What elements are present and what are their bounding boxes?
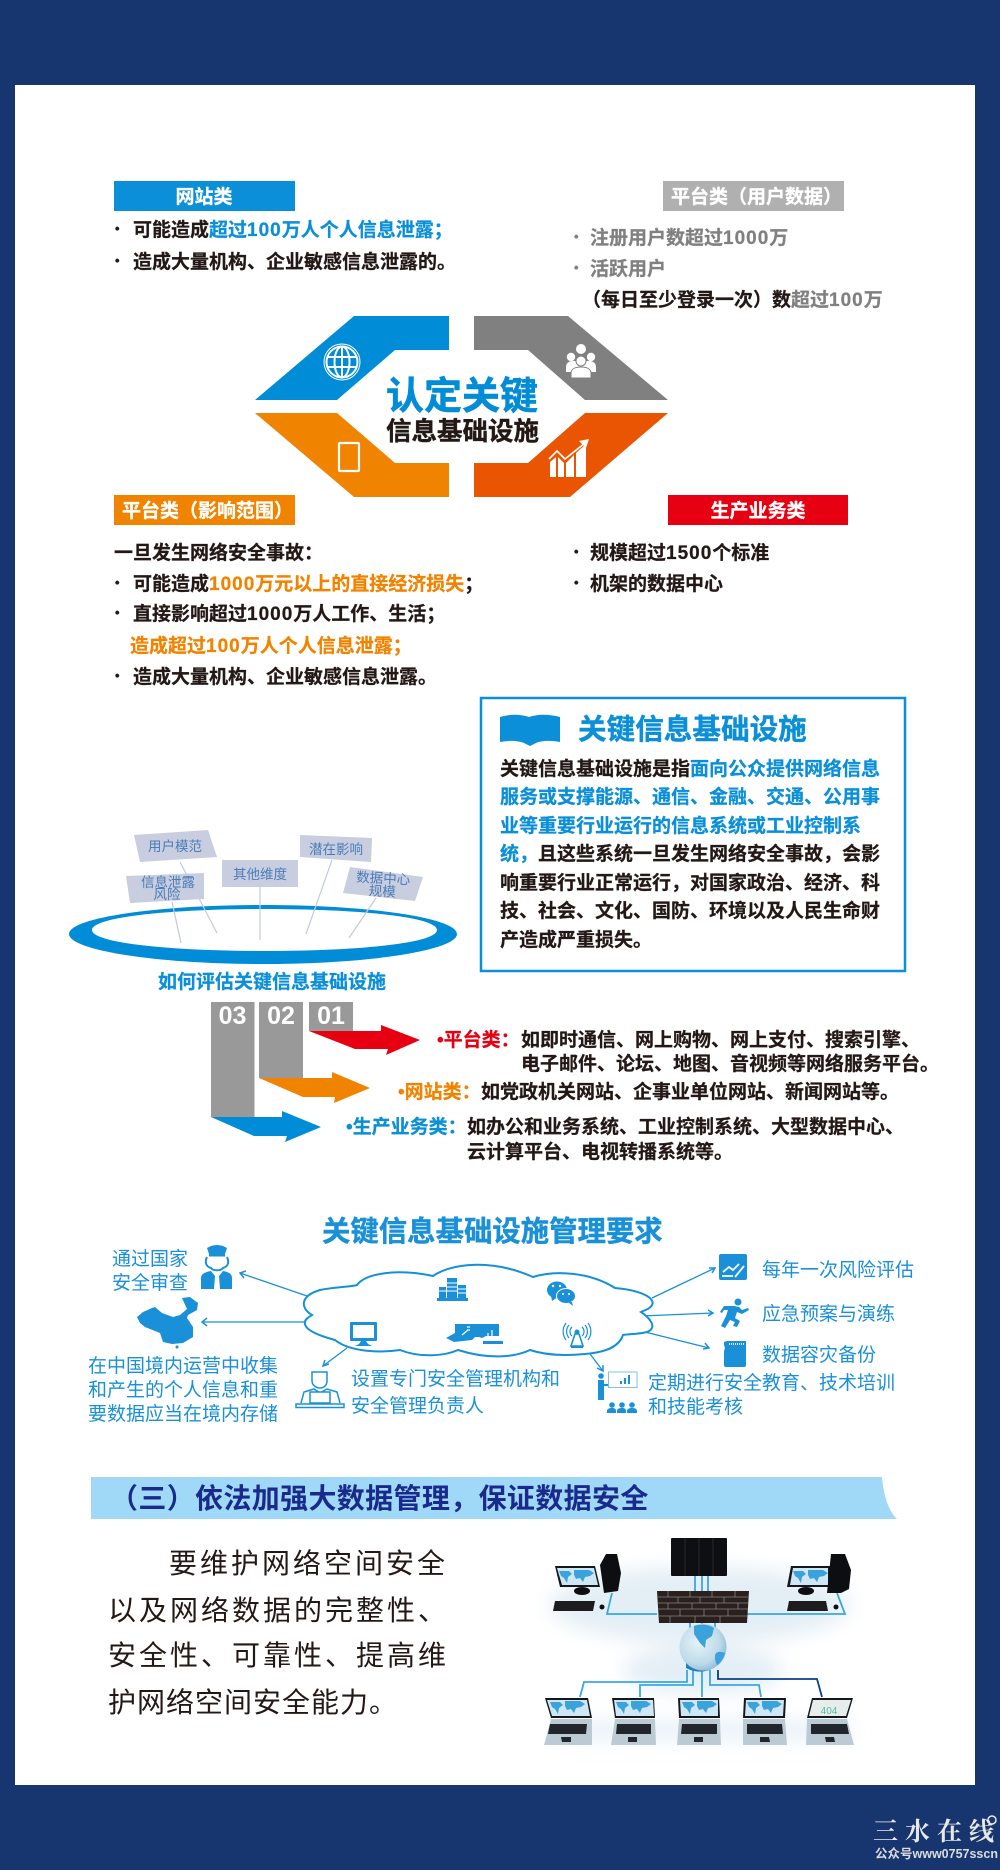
section banner: （三）依法加强大数据管理，保证数据安全 bbox=[110, 1477, 649, 1517]
definition text: 关键信息基础设施是指面向公众提供网络信息 bbox=[500, 757, 880, 780]
panel: production category bbox=[574, 495, 848, 595]
sign: 其他维度 bbox=[222, 860, 298, 887]
sign: 数据中心规模: 规模 bbox=[368, 883, 397, 900]
requirement: emergency drill bbox=[720, 1298, 895, 1328]
sign: 潜在影响 bbox=[300, 835, 372, 862]
center title bbox=[386, 376, 539, 446]
globe bbox=[680, 1624, 726, 1672]
bullet list: website: 可能造成超过100万人个人信息泄露； bbox=[133, 215, 453, 242]
requirement: risk assessment: 每年一次风险评估 bbox=[762, 1259, 914, 1281]
badge: 生产业务类 bbox=[668, 495, 848, 525]
bullet list: production: • bbox=[574, 544, 579, 559]
badge: 网站类 bbox=[114, 181, 295, 211]
icon: buildings bbox=[437, 1278, 468, 1301]
chart caption: 如何评估关键信息基础设施 bbox=[158, 970, 386, 993]
bullet list: platform user data: • bbox=[574, 260, 579, 275]
section body text: 护网络空间安全能力。 bbox=[108, 1687, 398, 1718]
segment: orange with phone icon bbox=[255, 413, 449, 497]
requirement: security organization: 安全管理负责人 bbox=[351, 1395, 484, 1417]
requirement: security review: 通过国家 bbox=[112, 1248, 188, 1270]
bullet list: website: • bbox=[115, 221, 120, 236]
requirement: security organization bbox=[296, 1368, 560, 1417]
definition text: 技、社会、文化、国防、环境以及人民生命财 bbox=[500, 899, 880, 922]
bullet list: website bbox=[115, 215, 456, 273]
sign: 信息泄露风险 bbox=[126, 873, 204, 903]
watermark logo: 三水在线 bbox=[873, 1812, 1000, 1848]
sign: 信息泄露风险: 风险 bbox=[154, 887, 181, 902]
bullet list: platform impact: • bbox=[115, 575, 120, 590]
panel: website category bbox=[114, 181, 456, 273]
panel: definition box bbox=[481, 698, 905, 971]
section body text: 要维护网络空间安全 bbox=[169, 1548, 448, 1579]
laptop 5: 404 error: 404 bbox=[821, 1706, 838, 1717]
connector arrows bbox=[202, 1268, 715, 1371]
bullet list: platform impact: 造成超过100万人个人信息泄露； bbox=[130, 631, 412, 658]
icon: assessment document bbox=[719, 1254, 747, 1280]
center title: 认定关键 bbox=[386, 376, 538, 418]
bar 03 with blue arrow bbox=[211, 1002, 321, 1142]
bullet list: platform impact: • bbox=[115, 668, 120, 683]
cloud bbox=[304, 1265, 653, 1356]
bullet list: production bbox=[574, 542, 769, 595]
requirement: data localization: 要数据应当在境内存储 bbox=[88, 1403, 278, 1425]
laptop 5: 404 error bbox=[806, 1698, 854, 1745]
firewall bbox=[657, 1591, 749, 1623]
icon: open book bbox=[500, 715, 560, 746]
text: website bbox=[398, 1077, 899, 1104]
bullet list: production: • bbox=[574, 575, 579, 590]
server racks bbox=[671, 1538, 727, 1576]
icon: map of China bbox=[137, 1297, 198, 1348]
text: website: 如党政机关网站、企事业单位网站、新闻网站等。 bbox=[481, 1080, 899, 1103]
bullet list: platform user data: 活跃用户 bbox=[590, 257, 666, 280]
laptop 3 bbox=[677, 1698, 721, 1745]
bullet list: production: 规模超过1500个标准 bbox=[590, 542, 769, 564]
sign: 数据中心规模 bbox=[343, 867, 423, 901]
bullet list: platform user data: （每日至少登录一次）数超过100万 bbox=[582, 289, 883, 311]
watermark logo: 公众号www0757sscn bbox=[875, 1847, 998, 1861]
center title: 信息基础设施 bbox=[386, 418, 539, 446]
text: production: 云计算平台、电视转播系统等。 bbox=[467, 1140, 733, 1163]
laptop 4 bbox=[743, 1698, 787, 1745]
panel: platform impact category bbox=[114, 495, 483, 688]
requirement: data localization: 和产生的个人信息和重 bbox=[88, 1379, 278, 1401]
bullet list: production: 机架的数据中心 bbox=[590, 573, 723, 595]
definition heading: 关键信息基础设施 bbox=[578, 714, 807, 746]
icon: antenna bbox=[563, 1323, 591, 1348]
right workstation bbox=[787, 1554, 851, 1611]
badge: 网站类: 网站类 bbox=[175, 186, 233, 208]
text: platform: 电子邮件、论坛、地图、音视频等网络服务平台。 bbox=[521, 1052, 939, 1075]
badge: 生产业务类: 生产业务类 bbox=[710, 500, 806, 522]
requirement: backup: 数据容灾备份 bbox=[762, 1344, 876, 1366]
section banner bbox=[91, 1477, 897, 1519]
icon: manager at desk bbox=[296, 1372, 344, 1408]
text: platform: •平台类： bbox=[437, 1025, 520, 1052]
icon: officer bbox=[201, 1245, 232, 1289]
sign: 其他维度: 其他维度 bbox=[233, 867, 287, 882]
text: production: 如办公和业务系统、工业控制系统、大型数据中心、 bbox=[467, 1115, 904, 1138]
bullet list: platform user data: • bbox=[574, 229, 579, 244]
requirement: security organization: 设置专门安全管理机构和 bbox=[351, 1368, 560, 1390]
icon: chat bubbles bbox=[547, 1282, 576, 1306]
text: production: •生产业务类： bbox=[346, 1112, 467, 1139]
bar 03 with blue arrow: 03 bbox=[219, 1002, 246, 1030]
text: production bbox=[346, 1112, 904, 1163]
sign sticks bbox=[172, 860, 376, 943]
icon: runner bbox=[720, 1298, 749, 1328]
badge: 平台类（影响范围）: 平台类（影响范围） bbox=[122, 499, 293, 522]
panel: platform user data category bbox=[574, 181, 883, 311]
illustration: network topology bbox=[544, 1538, 854, 1745]
bullet list: platform impact: • bbox=[115, 605, 120, 620]
requirement: training bbox=[598, 1372, 895, 1418]
badge: 平台类（影响范围） bbox=[114, 495, 295, 525]
icon: data center bbox=[446, 1324, 503, 1344]
requirement: data localization: 在中国境内运营中收集 bbox=[88, 1355, 278, 1377]
badge: 平台类（用户数据） bbox=[663, 181, 844, 211]
icon: monitor bbox=[350, 1322, 377, 1346]
section body text: 安全性、可靠性、提高维 bbox=[108, 1640, 449, 1671]
soft shadows bbox=[550, 1567, 850, 1738]
bar 02 with orange arrow bbox=[259, 1002, 370, 1103]
text: website: •网站类： bbox=[398, 1077, 481, 1104]
sign: 潜在影响: 潜在影响 bbox=[309, 842, 363, 857]
requirement: training: 定期进行安全教育、技术培训 bbox=[648, 1372, 895, 1394]
requirement: security review bbox=[112, 1245, 232, 1294]
definition text: 响重要行业正常运行，对国家政治、经济、科 bbox=[500, 868, 880, 895]
bullet list: website: 造成大量机构、企业敏感信息泄露的。 bbox=[133, 250, 456, 273]
section body text: 以及网络数据的完整性、 bbox=[108, 1595, 449, 1626]
laptop 1 bbox=[544, 1698, 592, 1745]
diagram: management requirements bbox=[88, 1216, 914, 1425]
ring bbox=[69, 905, 457, 964]
network lines bbox=[580, 1576, 845, 1697]
bullet list: platform user data bbox=[574, 226, 883, 311]
definition text bbox=[500, 757, 880, 951]
sign: 数据中心规模: 数据中心 bbox=[356, 870, 411, 887]
bullet list: platform impact: 造成大量机构、企业敏感信息泄露。 bbox=[133, 665, 437, 688]
requirement: risk assessment bbox=[719, 1254, 914, 1281]
segment: gray with people icon bbox=[474, 316, 668, 400]
badge: 平台类（用户数据）: 平台类（用户数据） bbox=[671, 185, 842, 208]
sign: 用户模范: 用户模范 bbox=[148, 838, 202, 854]
laptop 2 bbox=[611, 1698, 656, 1745]
section body text bbox=[108, 1548, 449, 1718]
segment: blue with globe icon bbox=[255, 316, 449, 400]
hexagon diagram: 认定关键信息基础设施 bbox=[255, 316, 668, 497]
definition text: 统，且这些系统一旦发生网络安全事故，会影 bbox=[500, 839, 880, 866]
bullet list: platform impact: 直接影响超过1000万人工作、生活； bbox=[133, 599, 445, 626]
bullet list: website: • bbox=[115, 253, 120, 268]
requirement: training: 和技能考核 bbox=[648, 1396, 743, 1418]
text: platform bbox=[437, 1025, 939, 1075]
bullet list: platform impact bbox=[114, 538, 483, 688]
segment: dark orange with chart icon bbox=[474, 413, 668, 497]
icon: memory card bbox=[724, 1341, 746, 1367]
bullet list: platform user data: 注册用户数超过1000万 bbox=[590, 226, 788, 249]
bar 01 with red arrow: 01 bbox=[317, 1002, 345, 1030]
definition text: 产造成严重损失。 bbox=[500, 928, 652, 951]
definition text: 业等重要行业运行的信息系统或工业控制系 bbox=[500, 814, 861, 837]
bullet list: platform impact: 可能造成1000万元以上的直接经济损失； bbox=[133, 569, 483, 596]
heading: 关键信息基础设施管理要求 bbox=[322, 1216, 663, 1248]
text: platform: 如即时通信、网上购物、网上支付、搜索引擎、 bbox=[521, 1029, 920, 1051]
bar 02 with orange arrow: 02 bbox=[267, 1002, 295, 1030]
chart: evaluation ring with signs bbox=[69, 830, 457, 993]
sign: 信息泄露风险: 信息泄露 bbox=[141, 874, 195, 890]
cloud icons bbox=[350, 1278, 591, 1348]
requirement: data localization bbox=[88, 1297, 278, 1425]
requirement: emergency drill: 应急预案与演练 bbox=[762, 1303, 895, 1325]
requirement: backup bbox=[724, 1341, 876, 1367]
icon: trainer and audience bbox=[598, 1372, 637, 1413]
sign: 用户模范 bbox=[134, 830, 217, 862]
definition text: 服务或支撑能源、通信、金融、交通、公用事 bbox=[500, 785, 880, 808]
left workstation bbox=[553, 1554, 621, 1611]
bar 01 with red arrow bbox=[309, 1002, 420, 1055]
requirement: security review: 安全审查 bbox=[112, 1272, 188, 1294]
bullet list: platform impact: 一旦发生网络安全事故： bbox=[114, 538, 323, 565]
diagram: three numbered category arrows bbox=[211, 1002, 939, 1163]
